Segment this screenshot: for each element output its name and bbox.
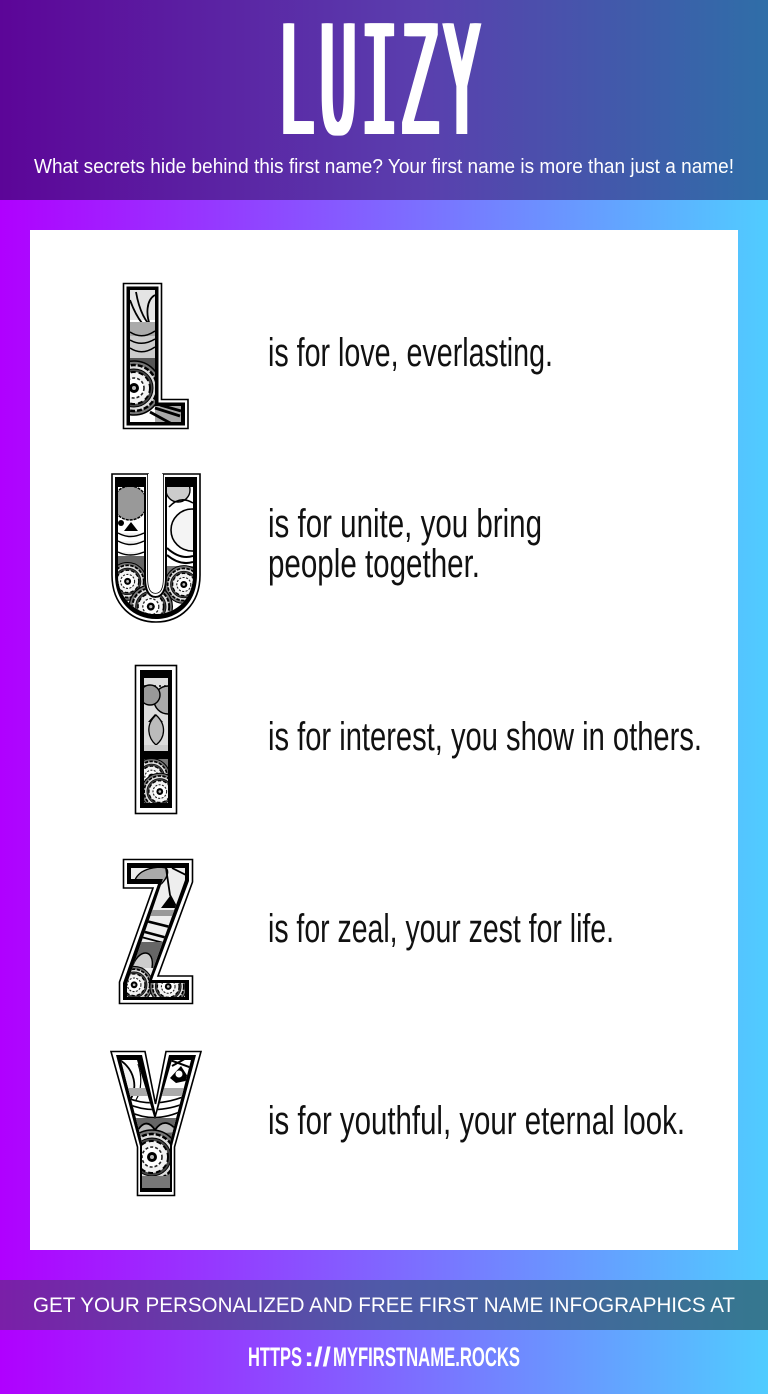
icon: letter U: [111, 473, 201, 623]
text: L meaning: is for love, everlasting.: [268, 331, 553, 375]
text: U meaning: people together.: [268, 542, 480, 586]
footer url: HTTPS: [248, 1342, 302, 1372]
subtitle: What secrets hide behind this first name? Your first name is more than just a name!: [34, 156, 734, 178]
text: U meaning: is for unite, you bring: [268, 502, 542, 546]
footer url: ://: [304, 1342, 332, 1372]
icon: letter L: [122, 282, 189, 430]
header band: [0, 0, 768, 200]
text: U meaning: [268, 502, 542, 586]
icon: letter Y: [111, 1052, 201, 1196]
infographic artwork and text: [34, 158, 734, 1366]
footer call-to-action band: [0, 1280, 768, 1330]
footer call-to-action text: GET YOUR PERSONALIZED AND FREE FIRST NAME INFOGRAPHICS AT: [33, 1294, 735, 1317]
title: LUIZY: [278, 0, 485, 186]
icon: letter Z: [116, 860, 192, 1005]
text: Z meaning: is for zeal, your zest for life.: [268, 907, 614, 951]
icon: letter I: [134, 664, 178, 814]
footer url: MYFIRSTNAME.ROCKS: [333, 1342, 520, 1372]
main white panel: [30, 230, 738, 1250]
footer url: [248, 1342, 520, 1372]
